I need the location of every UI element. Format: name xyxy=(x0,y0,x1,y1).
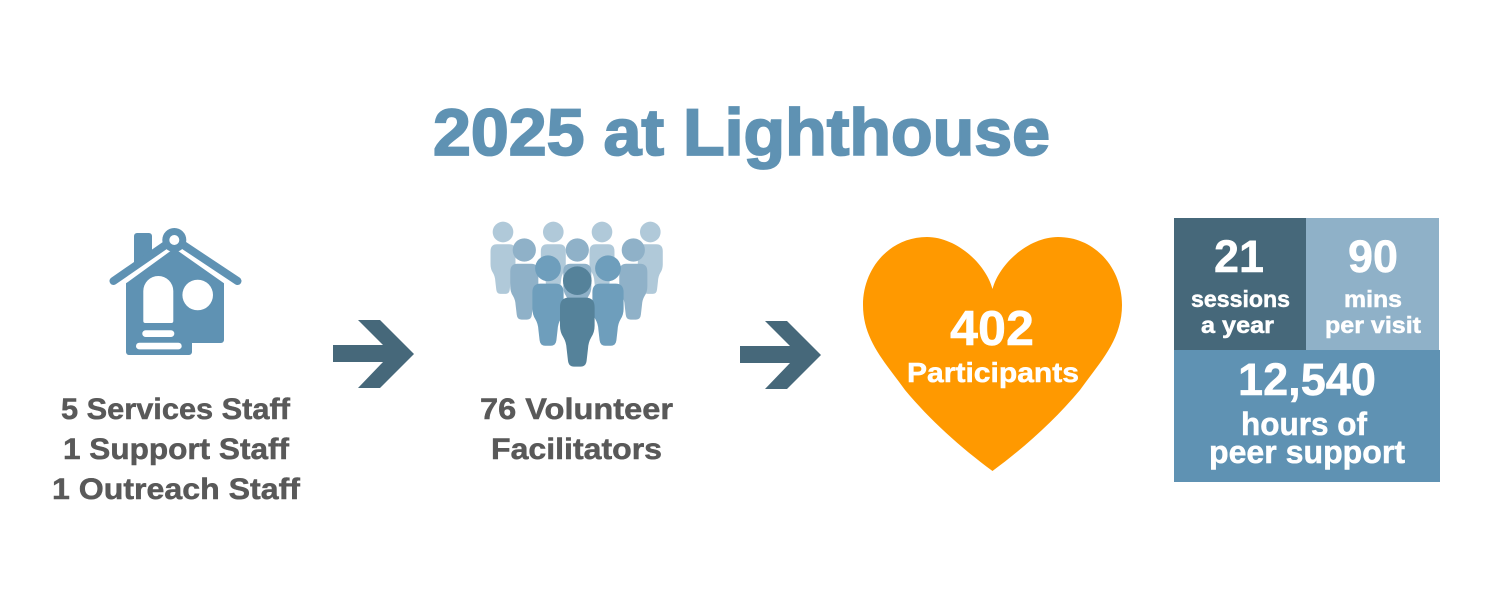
panel: minutes per visit: per visit xyxy=(1325,312,1421,338)
title: 2025 at Lighthouse xyxy=(433,95,1050,169)
panel: sessions a year xyxy=(1174,218,1306,350)
text: staff list: 5 Services Staff xyxy=(61,393,291,426)
panel: sessions a year: sessions xyxy=(1191,286,1290,312)
panel: sessions a year: a year xyxy=(1201,312,1274,338)
panel: sessions a year: 21 xyxy=(1214,231,1264,282)
heart: participants: 402 xyxy=(950,302,1034,356)
arrow: volunteers to participants xyxy=(740,321,821,389)
panel: hours of peer support xyxy=(1174,350,1440,482)
text: staff list: 1 Support Staff xyxy=(63,433,290,466)
heart: participants: Participants xyxy=(907,357,1079,388)
text: staff list xyxy=(52,393,301,506)
text: volunteer facilitators xyxy=(480,393,673,466)
icon: group of people xyxy=(491,222,663,367)
panel: hours of peer support: hours of xyxy=(1241,406,1367,442)
text: volunteer facilitators: Facilitators xyxy=(491,433,662,466)
text: staff list: 1 Outreach Staff xyxy=(52,473,301,506)
panel: minutes per visit: 90 xyxy=(1348,231,1398,282)
panel: minutes per visit: mins xyxy=(1344,286,1402,312)
heart: participants xyxy=(863,237,1122,471)
panel: hours of peer support: peer support xyxy=(1209,434,1405,470)
icon: house xyxy=(114,228,238,355)
arrow: staff to volunteers xyxy=(333,320,414,388)
text: volunteer facilitators: 76 Volunteer xyxy=(480,393,673,426)
panel: minutes per visit xyxy=(1306,218,1439,350)
panel: hours of peer support: 12,540 xyxy=(1238,354,1376,405)
